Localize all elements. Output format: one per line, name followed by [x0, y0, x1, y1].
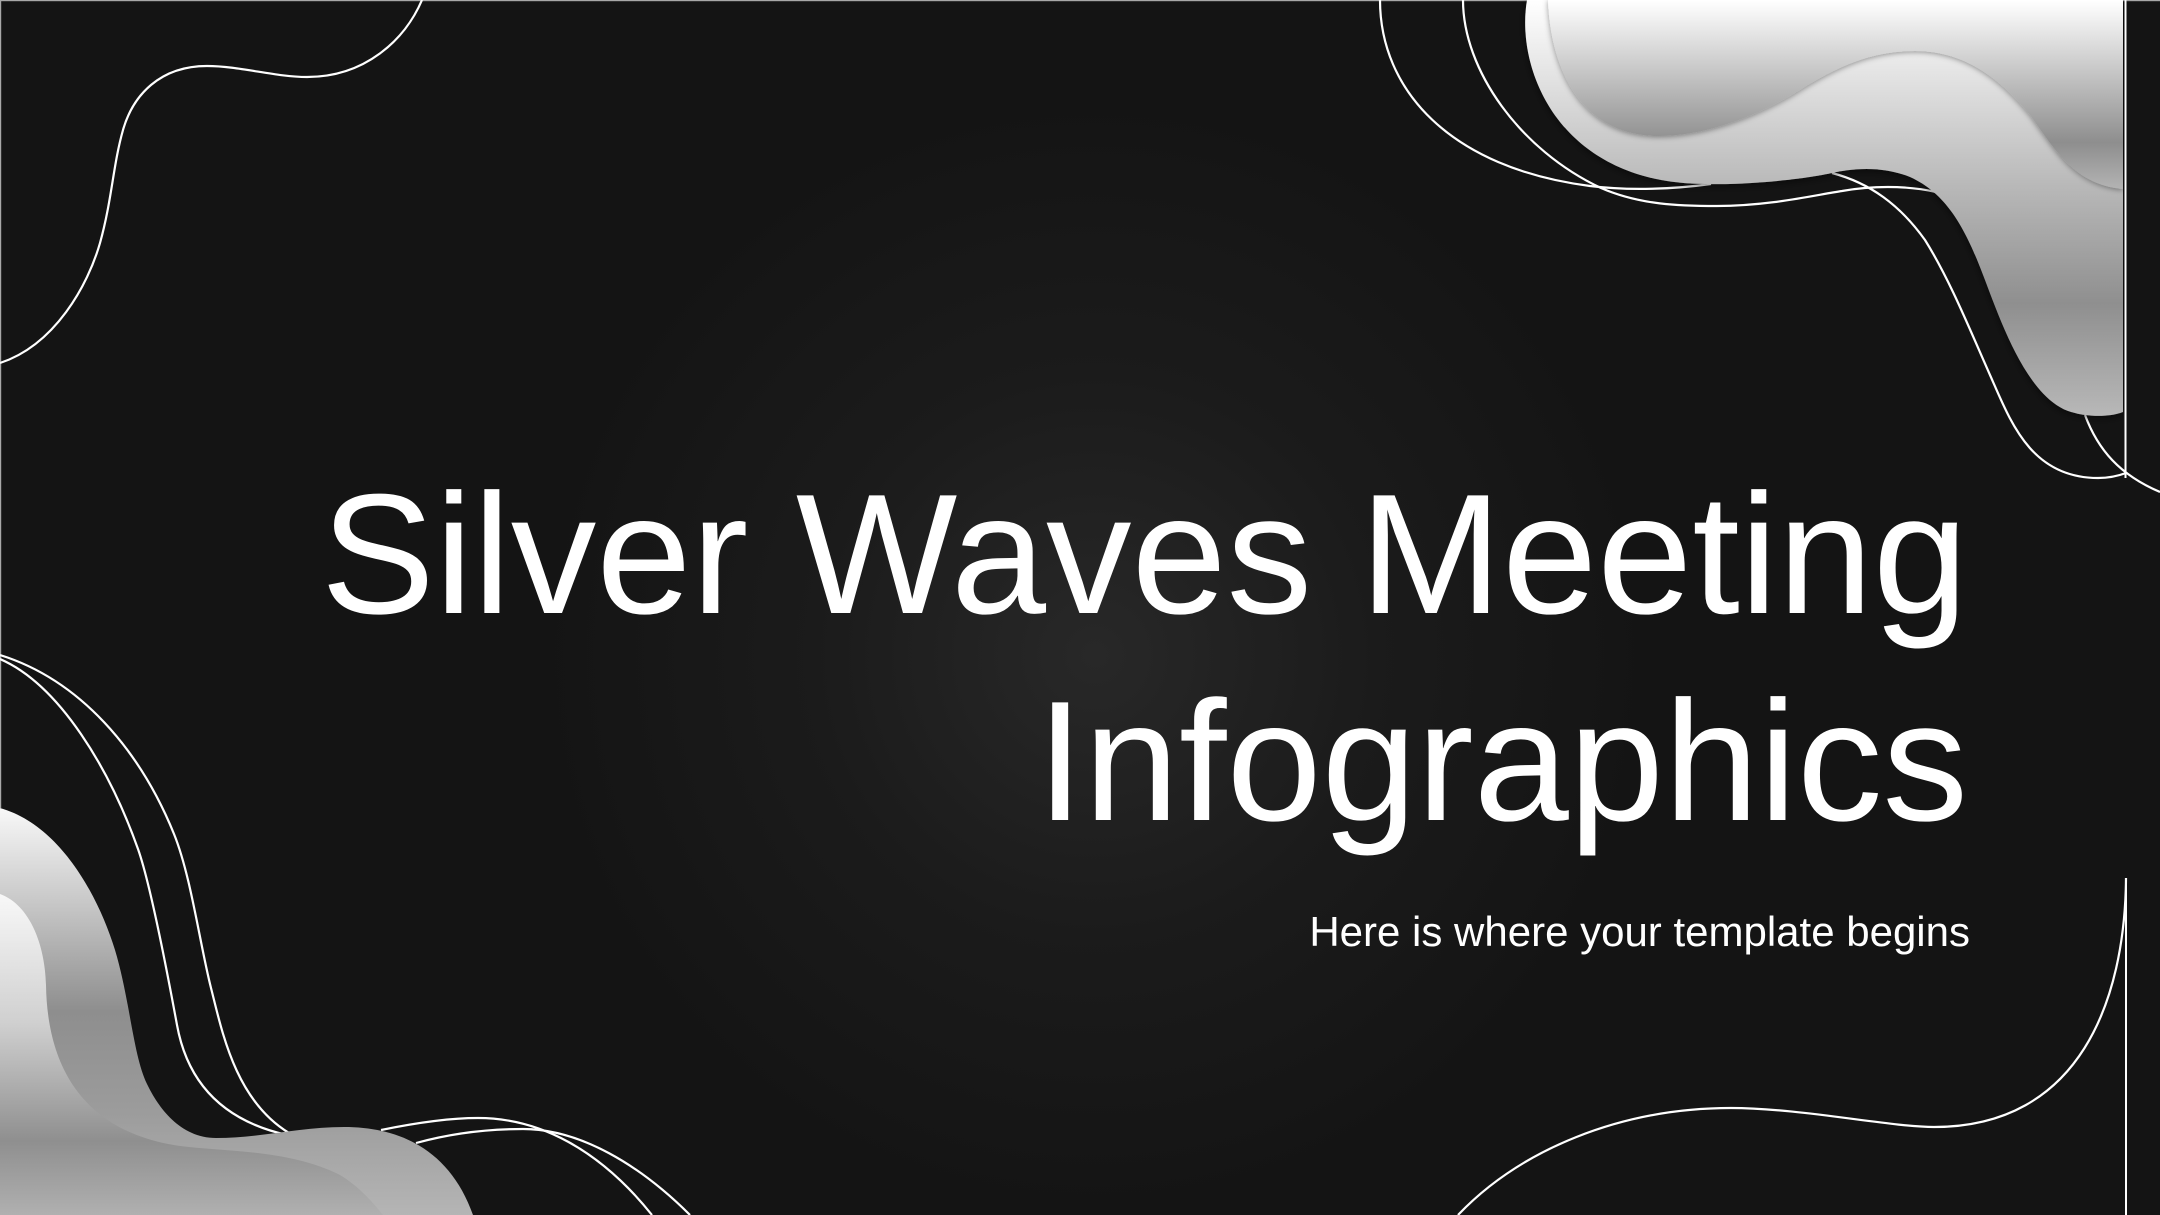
- silver wave: top right: [1525, 0, 2123, 416]
- wave line: bottom right: [1458, 878, 2126, 1215]
- wave lines: top right: [1380, 0, 2160, 492]
- wave lines: bottom left: [0, 655, 690, 1215]
- title: Silver Waves Meeting: [321, 459, 1968, 650]
- silver wave: bottom left: [0, 808, 473, 1215]
- vertical line: top right: [2124, 0, 2126, 478]
- vertical line: bottom right: [2125, 878, 2127, 1215]
- slide edge lines: [0, 0, 2160, 808]
- subtitle: Here is where your template begins: [1309, 908, 1970, 955]
- title: Infographics: [1036, 666, 1968, 857]
- wave line: top left: [0, 0, 422, 363]
